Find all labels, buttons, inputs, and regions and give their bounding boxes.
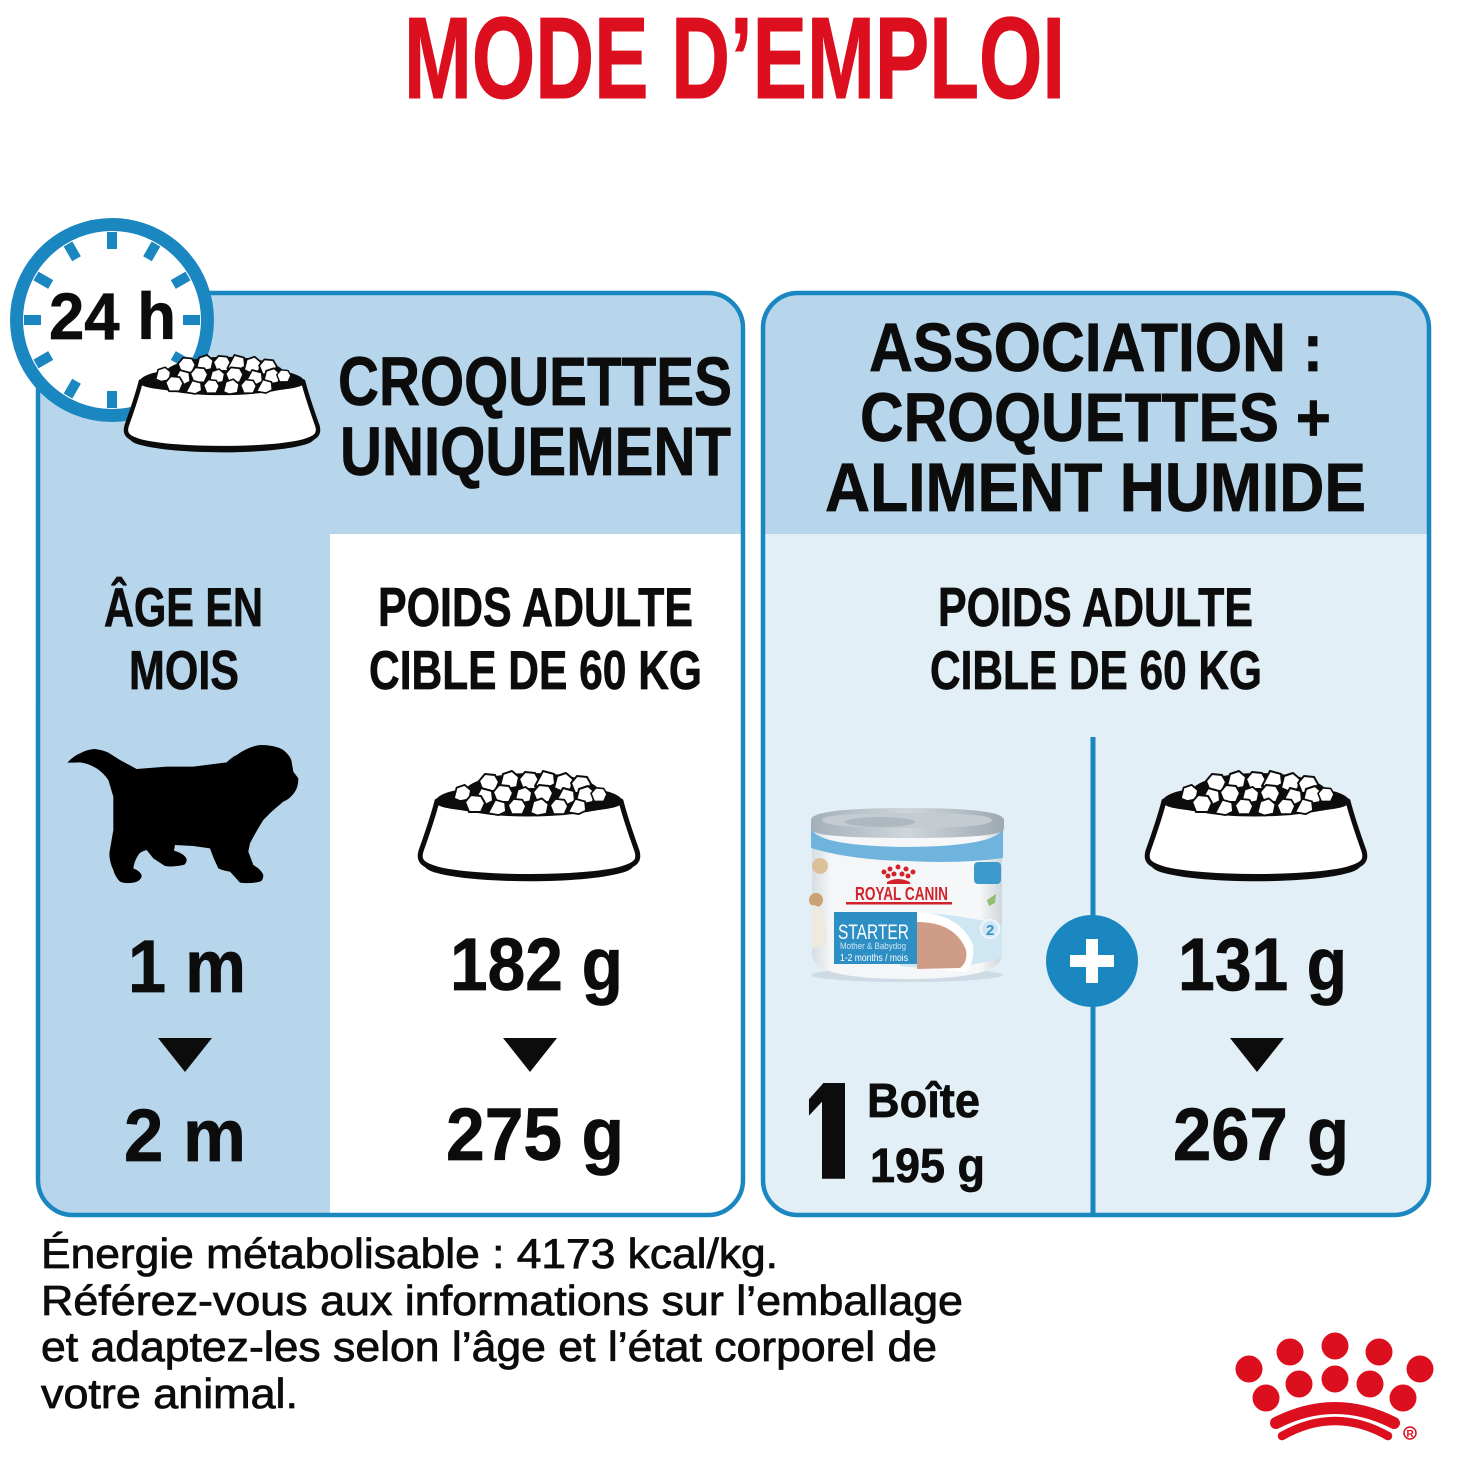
column heading: age: ÂGE EN [104,576,263,638]
icon: puppy silhouette [67,745,298,883]
panel: association [763,293,1429,1215]
footer text: votre animal. [41,1370,298,1417]
image: wet food can: Mother & Babydog [840,941,906,951]
values: one can: Boîte [867,1075,980,1128]
column heading: target weight right: CIBLE DE 60 KG [930,639,1262,701]
heading: croquettes uniquement: UNIQUEMENT [340,413,731,490]
heading: association: CROQUETTES + [860,379,1331,456]
white weight column [330,534,741,1213]
column heading: target weight left: CIBLE DE 60 KG [369,639,702,701]
column heading: target weight left [369,576,702,701]
image: wet food can [809,808,1004,982]
arrow: kibble combined [1230,1038,1284,1072]
icon: bowl header [126,355,318,452]
footer text: Énergie métabolisable : 4173 kcal/kg. [41,1230,778,1277]
footer text: Référez-vous aux informations sur l’emballage [41,1277,963,1324]
column heading: age: MOIS [129,639,239,701]
values: kibble combined [1173,923,1349,1176]
heading: association: ALIMENT HUMIDE [825,449,1366,526]
logo: royal canin crown: R [1406,1429,1414,1440]
values: one can: 1 [804,1055,848,1207]
footer text: et adaptez-les selon l’âge et l’état corporel de [41,1323,937,1370]
arrow: age [158,1038,212,1072]
values: kibble combined: 131 g [1178,923,1347,1006]
values: kibble only: 275 g [446,1093,624,1176]
icon: 24 h clock [16,224,208,416]
values: age: 2 m [124,1094,246,1177]
image: wet food can: ROYAL CANIN [855,884,948,904]
heading: croquettes uniquement: CROQUETTES [338,343,732,420]
values: age [124,925,246,1177]
logo: royal canin crown [1236,1332,1434,1440]
column heading: age [104,576,263,701]
heading: association: ASSOCIATION : [869,309,1323,386]
image: wet food can: 1-2 months / mois [840,953,908,964]
values: kibble combined: 267 g [1173,1093,1349,1176]
values: one can: 195 g [870,1140,985,1193]
icon: plus [1046,915,1138,1007]
values: age: 1 m [128,925,246,1008]
column heading: target weight right: POIDS ADULTE [938,576,1253,638]
panel: croquettes uniquement [38,293,743,1215]
icon: bowl right [1147,771,1365,881]
values: kibble only: 182 g [450,923,623,1006]
values: kibble only [446,923,624,1176]
column heading: target weight left: POIDS ADULTE [378,576,693,638]
footer text [41,1230,963,1417]
icon: 24 h clock: 24 h [49,279,176,353]
values: one can [798,1055,985,1207]
image: wet food can: 2 [986,922,994,939]
arrow: kibble only [503,1038,557,1072]
column heading: target weight right [930,576,1262,701]
heading: croquettes uniquement [338,343,732,490]
image: wet food can: STARTER [838,921,909,944]
icon: bowl left [420,771,638,881]
divider with plus [1046,737,1138,1215]
light lower area [765,534,1427,1213]
heading: association [825,309,1366,526]
